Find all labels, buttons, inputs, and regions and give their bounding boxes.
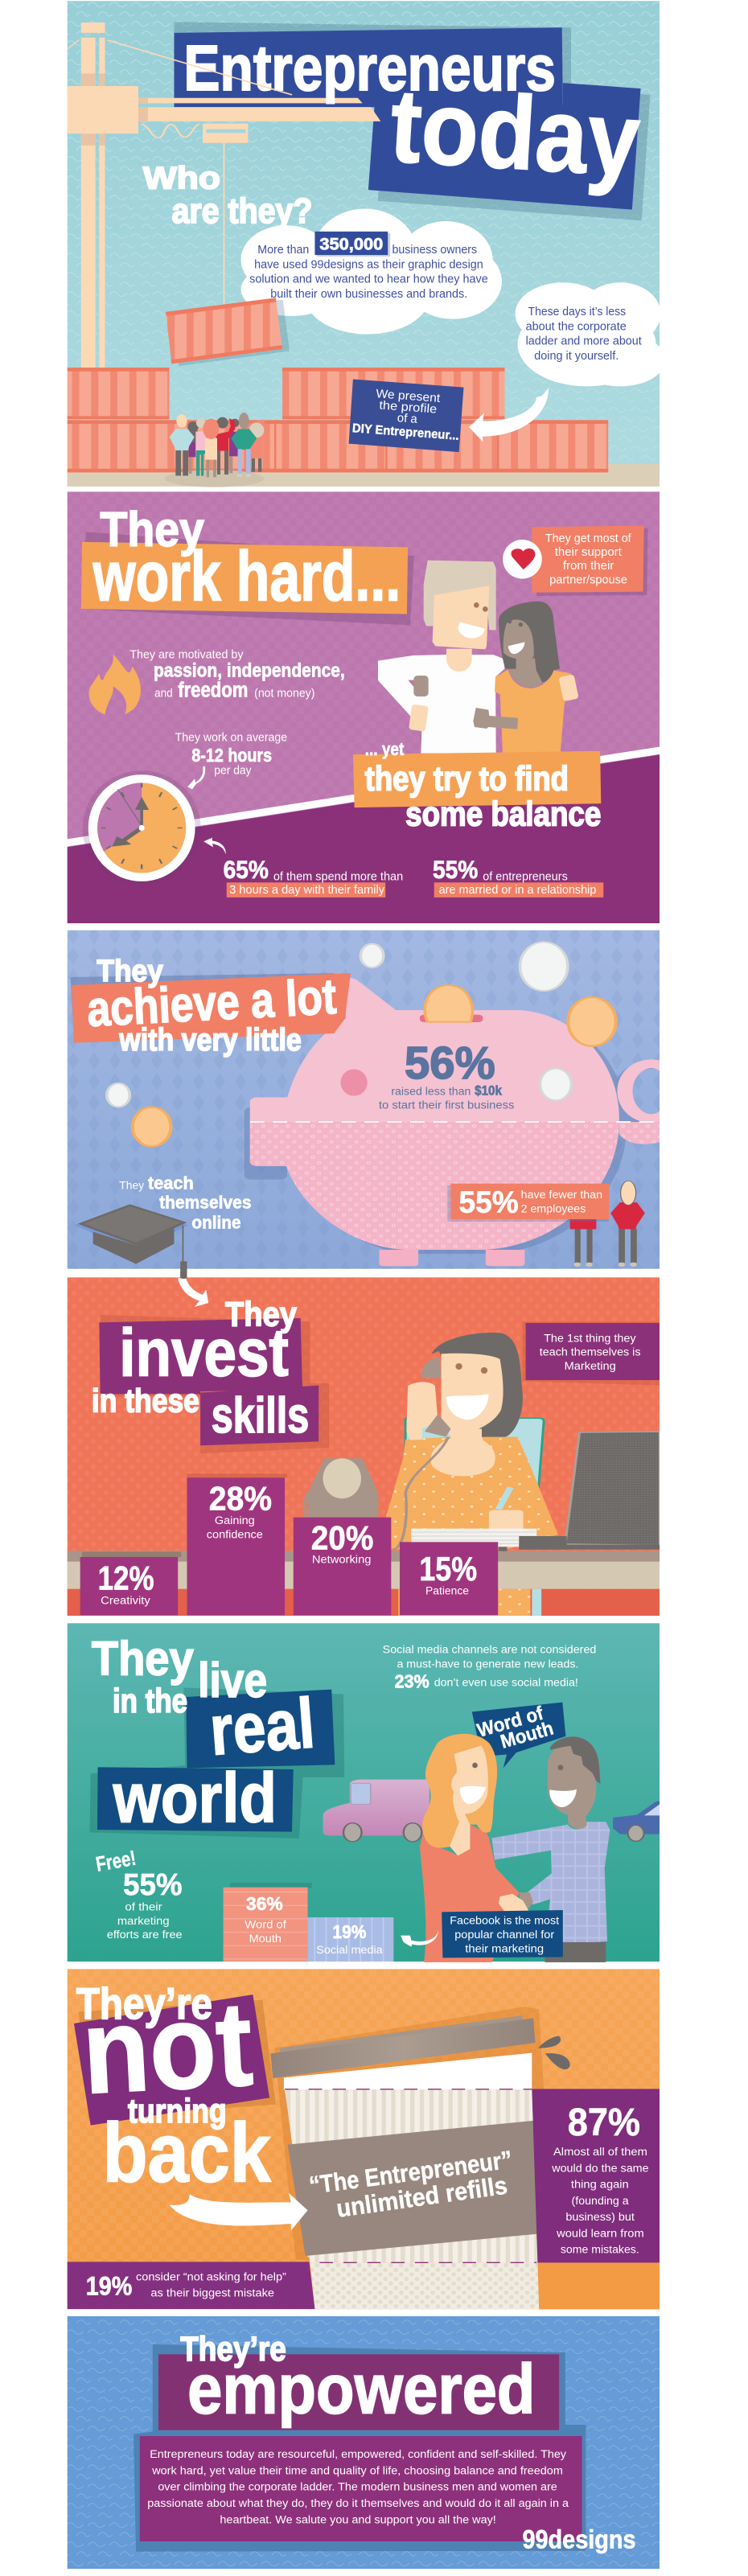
- van: [323, 1780, 429, 1842]
- woman on phone: [385, 1333, 558, 1616]
- crowd of people: [165, 413, 268, 487]
- bar: word of mouth: Word of: [245, 1919, 286, 1931]
- coffee drops: [538, 2036, 570, 2069]
- heading: They're turning back: They’re: [76, 1979, 212, 2028]
- title shadow: [79, 2000, 276, 2118]
- icon: flame: [88, 654, 141, 714]
- containers: [68, 368, 608, 472]
- text: cloud copy: [249, 243, 488, 301]
- title box: Entrepreneurs: [174, 27, 563, 107]
- panel: They're empowered: [68, 2316, 660, 2569]
- heading: yet they try to find some balance: [365, 740, 601, 833]
- callout: marketing: teach themselves is: [540, 1346, 641, 1358]
- panel: They achieve a lot: [68, 931, 684, 1281]
- text: teach themselves online: They: [119, 1180, 145, 1192]
- panel 2 background: [68, 491, 660, 923]
- summary box: [140, 2436, 582, 2541]
- chair: [405, 1418, 544, 1616]
- heading: They work hard: [92, 503, 401, 615]
- coffee cup: [270, 2015, 540, 2309]
- text: corporate ladder: about the corporate: [526, 319, 627, 333]
- panel: They live in the real world: live: [198, 1654, 267, 1707]
- stat: 56 percent: 56%: [405, 1037, 495, 1088]
- title box: world: [97, 1767, 294, 1832]
- callout: marketing: Marketing: [565, 1360, 616, 1372]
- title shadow: [101, 1315, 329, 1453]
- bar: creativity: [80, 1551, 181, 1615]
- cloud: 350,000 business owners: [241, 208, 502, 334]
- illustration: couple talking: [420, 1703, 610, 1962]
- text: cloud copy: business owners: [392, 243, 477, 257]
- text: teach themselves online: teach: [148, 1173, 194, 1193]
- text: we present the profile: the profile: [379, 398, 438, 417]
- text: we present the profile: DIY Entrepreneur...: [351, 421, 459, 443]
- callout: Facebook: popular channel for: [454, 1929, 554, 1941]
- bar: social media: 19%: [332, 1922, 367, 1943]
- bar: creativity: 12%: [98, 1559, 154, 1597]
- text: corporate ladder: [526, 305, 642, 363]
- badge: 350,000: 350,000: [319, 234, 383, 253]
- text: The Entrepreneur unlimited refills: [307, 2146, 514, 2223]
- stat: 87 percent: Almost all of them: [553, 2146, 647, 2158]
- heading: They work hard: They: [101, 503, 204, 557]
- heading: They invest in these skills: in these: [92, 1382, 199, 1419]
- stat: 55 percent free: efforts are free: [107, 1929, 183, 1941]
- heading: They live in the: They: [92, 1632, 194, 1686]
- panel 5 background: [68, 1623, 660, 1962]
- heading: They're empowered: They’re: [180, 2330, 286, 2369]
- text: teach themselves online: [119, 1173, 252, 1232]
- coin in slot: [425, 985, 472, 1022]
- text: corporate ladder: doing it yourself.: [534, 349, 619, 363]
- stat: 55 percent free: 55%: [123, 1867, 183, 1901]
- text: hours per day: 8-12 hours: [191, 745, 272, 766]
- crane: [68, 23, 380, 476]
- text: we present the profile: of a: [397, 411, 418, 426]
- text: Word of Mouth: Word of: [475, 1703, 546, 1742]
- text: social media: Social media channels are not considered: [383, 1644, 596, 1656]
- callout: Facebook: their marketing: [465, 1943, 544, 1955]
- title shadow: [134, 2344, 586, 2552]
- stat: 19 percent: as their biggest mistake: [150, 2287, 274, 2299]
- title shadow: [81, 532, 414, 625]
- panel 7 background: [68, 2316, 660, 2569]
- text: cloud copy: have used 99designs as their graphic design: [254, 257, 483, 271]
- title box: [81, 542, 408, 614]
- bar: networking: Networking: [312, 1554, 371, 1566]
- stat: 19 percent: 19%: [86, 2271, 132, 2300]
- stat: 55 percent employees: 2 employees: [521, 1203, 586, 1215]
- title box shadow: [174, 22, 571, 108]
- text: social media: don’t even use social media!: [434, 1677, 578, 1689]
- text: Word of Mouth: Mouth: [498, 1718, 556, 1753]
- stat: 65 percent family: [224, 856, 403, 898]
- stat: 87 percent: (founding a: [572, 2195, 629, 2207]
- heading: Who are they: Who: [143, 160, 220, 195]
- panel: hero Entrepreneurs today: [68, 1, 665, 487]
- title shadow: [71, 973, 334, 1039]
- stat: 55 percent employees: 55%: [459, 1185, 519, 1219]
- text: social media: a must-have to generate new leads.: [397, 1658, 578, 1670]
- title box: [74, 1995, 269, 2126]
- stat: 87 percent: would do the same: [552, 2163, 649, 2175]
- stat: 65 percent family: 3 hours a day with their family: [229, 883, 385, 897]
- bar: word of mouth: [224, 1883, 312, 1962]
- stat: 19 percent: [68, 2262, 314, 2309]
- stat: 87 percent: some mistakes.: [561, 2244, 639, 2256]
- title shadow: [90, 1687, 344, 1839]
- desk phone: [304, 1437, 449, 1550]
- bar: creativity: Creativity: [101, 1595, 150, 1607]
- stat: 56 percent: $10k: [475, 1083, 502, 1099]
- text: motivations: (not money): [254, 687, 314, 700]
- panel: They live in the real world: world: [113, 1758, 277, 1837]
- stat: 56 percent: raised less than: [391, 1086, 471, 1098]
- bar: gaining confidence: 28%: [209, 1480, 272, 1518]
- callout: Facebook: [442, 1910, 563, 1958]
- stat: 87 percent: would learn from: [556, 2228, 644, 2240]
- coins: silver: [107, 942, 572, 1107]
- bar: word of mouth: Mouth: [249, 1933, 282, 1945]
- title box: today: [368, 83, 641, 210]
- white divider band: [68, 746, 660, 847]
- stat: 55 percent married: 55%: [433, 856, 478, 884]
- heading: yet they try to find some balance: ... yet: [365, 740, 404, 759]
- text: cloud copy: solution and we wanted to hear how they have: [249, 272, 488, 286]
- stat: 87 percent: thing again: [571, 2179, 629, 2191]
- arrow to sign: [469, 388, 549, 442]
- text: motivations: passion, independence,: [154, 660, 345, 682]
- panel: They're not turning back: back: [103, 2106, 271, 2200]
- arrow: to cup: [170, 2193, 308, 2230]
- text: we present the profile: We present: [376, 387, 442, 405]
- heading: They with very little: They: [97, 953, 163, 988]
- speech bubble: [472, 1703, 565, 1768]
- ground: [68, 464, 660, 487]
- stat: 55 percent married: are married or in a relationship: [439, 883, 596, 897]
- panel 4 background: [68, 1277, 660, 1616]
- bar: patience: [400, 1542, 498, 1615]
- panel: They achieve a lot: with very little: [119, 1022, 302, 1057]
- tassel: [180, 1271, 187, 1279]
- employee figures: [570, 1181, 645, 1267]
- heading: They with very little: [97, 953, 302, 1057]
- text: motivations: and: [154, 687, 173, 700]
- text: cloud copy: More than: [257, 243, 309, 257]
- stat: 87 percent: 87%: [568, 2100, 640, 2143]
- title box: [158, 2354, 559, 2430]
- lower dark band: [68, 754, 660, 923]
- bar: patience: 15%: [419, 1551, 477, 1588]
- stat: 55 percent employees: have fewer than: [521, 1189, 602, 1201]
- bar: gaining confidence: Gaining: [215, 1514, 255, 1526]
- panel: They invest in these skills: skills: [212, 1387, 309, 1443]
- stat: 55 percent married: of entrepreneurs: [483, 869, 568, 883]
- text: corporate ladder: These days it’s less: [528, 305, 626, 318]
- text: motivations: freedom: [178, 679, 248, 702]
- text: hours per day: [175, 730, 287, 777]
- heading: They're turning back: turning: [128, 2092, 227, 2130]
- title box: [72, 973, 351, 1043]
- bar: social media: Social media: [316, 1944, 383, 1956]
- sign background: [349, 379, 463, 452]
- heading: yet they try to find some balance: they try to find: [365, 760, 569, 798]
- label: Free: Free!: [94, 1846, 138, 1876]
- stat: 55 percent married: [433, 856, 603, 898]
- heading: real: real: [207, 1682, 318, 1770]
- heading: They invest in these skills: invest: [119, 1316, 289, 1391]
- coins: orange: [133, 997, 616, 1146]
- stat: 87 percent: [532, 2089, 660, 2262]
- panel: They're not turning back: [68, 1969, 660, 2309]
- heading: They're turning back: [76, 1979, 271, 2200]
- box: they try to find: [353, 751, 601, 807]
- hero background: [68, 1, 660, 487]
- stat: 56 percent: to start their first business: [379, 1099, 514, 1111]
- callout: support from partner: partner/spouse: [549, 573, 627, 586]
- text: motivations: [129, 647, 345, 702]
- text: teach themselves online: themselves: [159, 1193, 252, 1213]
- arrow: to social media: [401, 1930, 438, 1947]
- panel: They work hard: work hard...: [92, 537, 401, 615]
- bar chart: skills: [80, 1473, 498, 1615]
- text: hours per day: per day: [214, 763, 252, 777]
- panel 3 background: [68, 931, 660, 1269]
- notebook: [411, 1529, 536, 1547]
- stat: 55 percent employees: [447, 1184, 609, 1222]
- text: The Entrepreneur unlimited refills: unlimited refills: [335, 2171, 509, 2223]
- panel: They invest in these skills: [68, 1271, 660, 1616]
- stat: 65 percent family: 65%: [224, 856, 269, 884]
- arrow: to 65 percent: [203, 838, 226, 854]
- heading: not: not: [79, 1975, 256, 2119]
- lower wall: [68, 1589, 660, 1616]
- text: teach themselves online: online: [191, 1212, 241, 1232]
- bar: networking: [294, 1518, 391, 1615]
- bar: gaining confidence: confidence: [207, 1529, 263, 1541]
- arrow: to They: [178, 1278, 208, 1307]
- crane guy line: [107, 40, 292, 95]
- desk: [68, 1551, 660, 1589]
- heading: They live in the: [92, 1632, 267, 1719]
- text: we present the profile: [351, 387, 459, 443]
- text: social media: 23%: [394, 1671, 429, 1692]
- panel: They live in the real world: [68, 1623, 660, 1962]
- title box: skills: [200, 1386, 319, 1445]
- heading: They live in the: in the: [113, 1682, 187, 1719]
- heading: Who are they: are they?: [172, 191, 312, 230]
- callout: support from partner: They get most of: [545, 532, 631, 545]
- clock: [83, 770, 201, 885]
- stat: 19 percent: consider “not asking for help”: [136, 2271, 286, 2283]
- stat: 55 percent free: [107, 1867, 183, 1941]
- logo: 99designs: 99designs: [522, 2525, 636, 2553]
- piggy bank: [250, 978, 660, 1266]
- cloud: corporate ladder: [516, 282, 665, 386]
- text: social media: [383, 1644, 596, 1692]
- heading: They invest in these skills: [92, 1295, 309, 1443]
- text: cloud copy: built their own businesses and brands.: [270, 287, 467, 301]
- blue car: [613, 1801, 660, 1841]
- icon: graduation cap: [74, 1204, 188, 1281]
- bar chart: channels: [224, 1883, 393, 1962]
- hanging container: [166, 298, 290, 366]
- cup shadow: [274, 2007, 544, 2260]
- panel: They work hard: [68, 491, 660, 923]
- badge: 350,000: [314, 232, 390, 257]
- heading: achieve a lot: achieve a lot: [86, 969, 338, 1037]
- heading: They invest in these skills: They: [225, 1295, 297, 1333]
- pig shadow: [245, 985, 684, 1254]
- bar: patience: Patience: [425, 1585, 469, 1597]
- heading: They're empowered: [180, 2330, 535, 2428]
- icon: heart bubble: [503, 540, 542, 579]
- bar: gaining confidence: [187, 1473, 287, 1615]
- callout: marketing: [522, 1321, 660, 1386]
- heading: today: today: [387, 66, 643, 199]
- summary box: heartbeat. We salute you and support you all the way!: [220, 2514, 496, 2526]
- bar: social media: [308, 1917, 393, 1962]
- arrow: to clock: [187, 766, 205, 789]
- text: corporate ladder: ladder and more about: [526, 334, 642, 348]
- panel 6 background: [68, 1969, 660, 2309]
- text: hours per day: They work on average: [175, 730, 287, 744]
- text: motivations: They are motivated by: [129, 647, 244, 661]
- illustration: couple: [378, 561, 579, 754]
- callout: Facebook: Facebook is the most: [450, 1915, 559, 1927]
- stat: 65 percent family: of them spend more than: [273, 869, 403, 883]
- callout: support from partner: their support: [555, 545, 622, 559]
- pig tail: [625, 1064, 677, 1119]
- bar: networking: 20%: [311, 1519, 373, 1557]
- stat: 55 percent free: marketing: [117, 1915, 170, 1927]
- callout: support from partner: [532, 526, 647, 596]
- title box: invest: [99, 1318, 302, 1394]
- bar: word of mouth: 36%: [246, 1894, 283, 1915]
- laptop: [499, 1432, 660, 1551]
- callout: marketing: The 1st thing they: [544, 1333, 636, 1345]
- stat: 56 percent: [379, 1037, 514, 1111]
- heading: Who are they: [143, 160, 312, 230]
- text: The Entrepreneur unlimited refills: “The Entrepreneur”: [307, 2146, 514, 2200]
- stat: 55 percent free: of their: [125, 1901, 162, 1913]
- callout: support from partner: from their: [563, 559, 614, 573]
- stat: 87 percent: business) but: [565, 2211, 635, 2223]
- title box: real: [186, 1690, 335, 1768]
